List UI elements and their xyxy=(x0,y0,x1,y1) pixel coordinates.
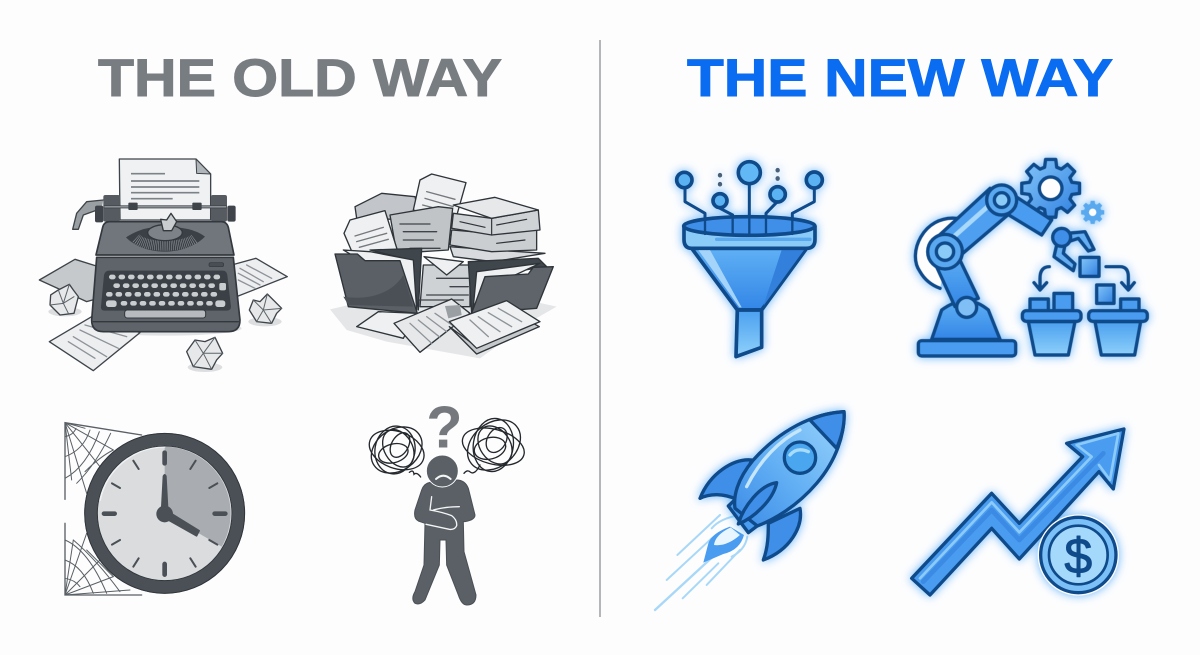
dollar coin: $ xyxy=(1064,528,1092,584)
icon: robot arm sorting boxes xyxy=(915,159,1147,356)
clock face xyxy=(91,439,239,587)
left folder xyxy=(335,248,422,313)
right tangle xyxy=(458,410,530,480)
title: the old way: THE OLD WAY xyxy=(98,49,502,108)
data nodes xyxy=(677,162,822,208)
rear fins xyxy=(700,460,752,499)
small gear xyxy=(1081,201,1104,224)
dollar coin xyxy=(1038,514,1119,596)
carriage xyxy=(73,195,236,229)
funnel spout xyxy=(736,310,762,357)
icon: data funnel xyxy=(677,162,822,357)
keyboard xyxy=(101,271,231,318)
robot base xyxy=(932,301,1000,339)
left tangle xyxy=(362,417,431,483)
porthole xyxy=(784,442,816,473)
arrows xyxy=(1034,267,1134,290)
funnel cone xyxy=(692,248,807,310)
center stack xyxy=(420,257,470,307)
icon: rocket launching xyxy=(655,412,844,610)
rocket body xyxy=(735,412,844,526)
icon: confused person with tangled thoughts xyxy=(362,394,530,605)
right folder xyxy=(468,258,553,313)
rising arrow xyxy=(912,429,1124,595)
hour marks xyxy=(104,453,225,575)
type basket xyxy=(126,213,205,252)
boxes in buckets xyxy=(1030,285,1139,311)
clock hands xyxy=(156,474,199,536)
exhaust flame xyxy=(703,527,744,563)
sorted box xyxy=(1080,257,1099,276)
icon: overflowing folders and paper piles xyxy=(330,174,557,358)
robot arm segments xyxy=(935,253,978,307)
person figure xyxy=(413,455,476,605)
top sheet xyxy=(413,174,466,222)
data lines xyxy=(685,183,814,232)
gripper xyxy=(1053,228,1094,271)
left bucket xyxy=(1022,311,1081,355)
engine ring xyxy=(728,495,761,533)
base swing arc xyxy=(915,218,957,288)
typewriter upper body xyxy=(96,222,234,255)
right bucket xyxy=(1089,311,1147,355)
typewriter lower body xyxy=(92,257,240,332)
right paper stack xyxy=(450,197,545,262)
loose sheets on the floor xyxy=(357,299,540,354)
cobweb xyxy=(65,423,142,595)
center fin xyxy=(738,483,777,524)
paper in carriage xyxy=(119,159,211,220)
large gear xyxy=(1022,159,1080,217)
left and middle stacks xyxy=(344,207,453,255)
title: the new way: THE NEW WAY xyxy=(687,49,1113,108)
icon: growth arrow with dollar coin xyxy=(912,429,1124,596)
question mark: ? xyxy=(426,394,462,461)
icon: typewriter with crumpled paper xyxy=(39,159,287,372)
vertical divider xyxy=(599,40,601,617)
funnel rim xyxy=(684,227,815,248)
speed streaks xyxy=(655,515,747,610)
crumpled papers xyxy=(48,284,282,372)
robot joints xyxy=(928,185,1017,317)
icon: clock covered with cobwebs xyxy=(65,423,245,595)
